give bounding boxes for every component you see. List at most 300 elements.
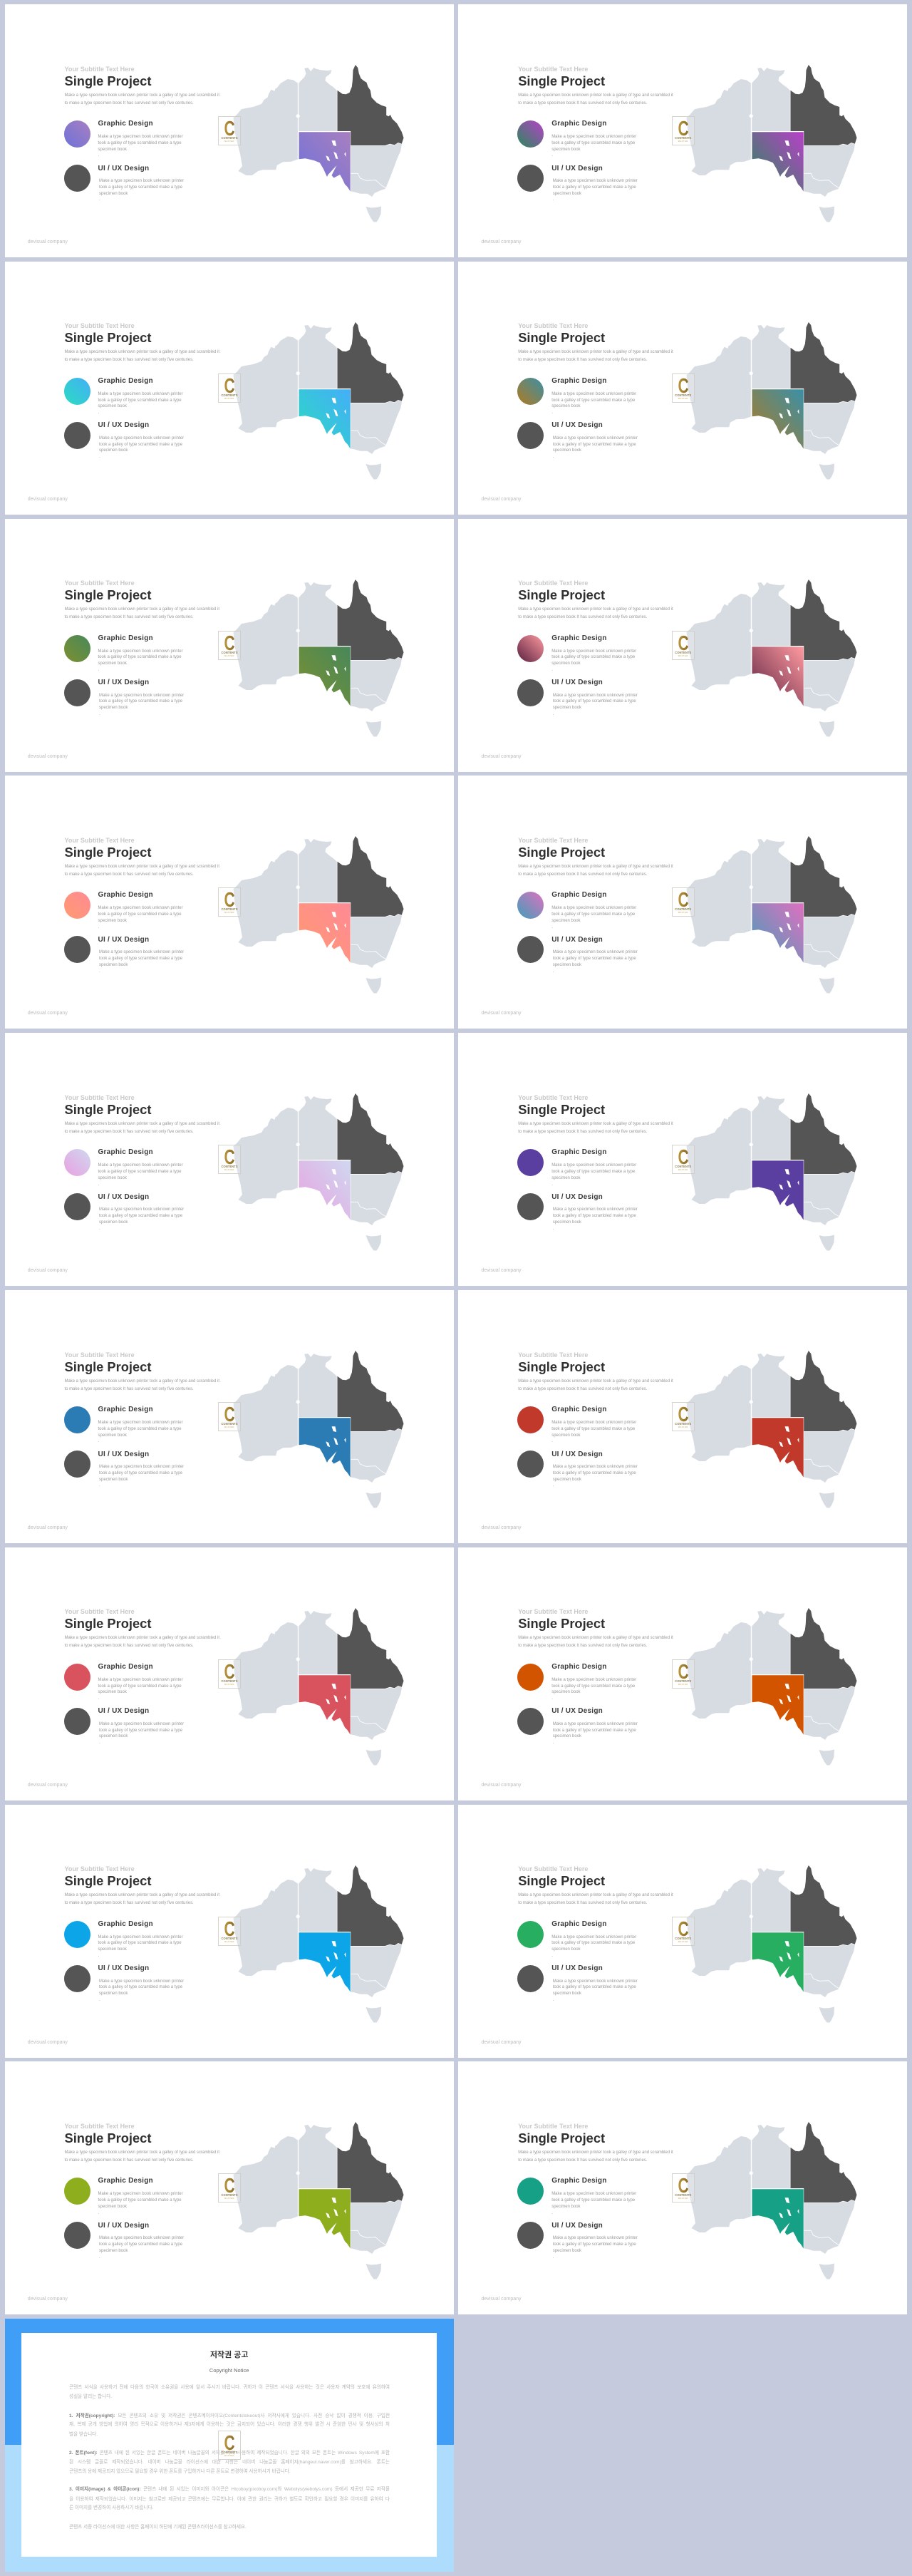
subtitle: Your Subtitle Text Here xyxy=(64,322,135,329)
logo watermark: CONTENTS xyxy=(675,1422,691,1426)
icon: graphic design circle xyxy=(64,1921,90,1948)
panel: slide 15 xyxy=(4,1805,454,2058)
logo watermark: CONTENTS xyxy=(221,651,238,654)
heading: UI UX design: UI / UX Design xyxy=(551,1707,603,1715)
icon: UI UX circle xyxy=(517,1451,544,1478)
heading: copyright notice Korean: 저작권 공고 xyxy=(210,2351,248,2359)
text: graphic design body: Make a type specimen book unknown printer took a galley of type scrambled make a type specimen book . xyxy=(98,1935,183,1958)
logo watermark: CONTENTS xyxy=(221,1679,238,1683)
logo watermark: MASTER xyxy=(678,140,688,143)
logo watermark xyxy=(218,887,241,917)
footer: devisual company xyxy=(481,2297,522,2302)
icon: graphic design circle xyxy=(517,378,544,405)
map: Australia xyxy=(687,1093,856,1250)
title: Single Project xyxy=(64,1102,151,1117)
title: Single Project xyxy=(518,1616,605,1631)
text: UI UX body: Make a type specimen book unknown printer took a galley of type scrambled make a type specimen book . xyxy=(553,694,638,716)
description line 2: to make a type specimen book It has survived not only five centuries. xyxy=(64,101,194,105)
description line 2: to make a type specimen book It has survived not only five centuries. xyxy=(518,101,647,105)
subtitle: Your Subtitle Text Here xyxy=(518,837,588,844)
logo watermark: MASTER xyxy=(678,1684,688,1686)
description line 2: to make a type specimen book It has survived not only five centuries. xyxy=(64,1901,194,1905)
logo watermark: MASTER xyxy=(224,1684,234,1686)
text: UI UX body: Make a type specimen book unknown printer took a galley of type scrambled make a type specimen book . xyxy=(99,694,184,716)
title: Single Project xyxy=(518,1359,605,1374)
footer: devisual company xyxy=(28,1525,68,1530)
icon: UI UX circle xyxy=(64,1965,90,1992)
logo watermark: C xyxy=(678,1661,688,1684)
text: UI UX body: Make a type specimen book unknown printer took a galley of type scrambled make a type specimen book . xyxy=(99,1207,184,1231)
map: Australia xyxy=(234,2122,403,2279)
heading: graphic design: Graphic Design xyxy=(551,2177,607,2185)
heading: graphic design: Graphic Design xyxy=(551,1920,607,1928)
description line 1: Make a type specimen book unknown printer took a galley of type and scrambled it xyxy=(64,607,219,612)
heading: UI UX design: UI / UX Design xyxy=(98,1707,149,1715)
icon: UI UX circle xyxy=(517,1708,544,1735)
title: Single Project xyxy=(518,73,605,88)
text: UI UX body: Make a type specimen book unknown printer took a galley of type scrambled make a type specimen book . xyxy=(553,1979,638,2002)
map: Australia xyxy=(687,65,856,222)
logo watermark: C xyxy=(678,2175,688,2198)
logo watermark: CONTENTS xyxy=(221,393,238,397)
heading: UI UX design: UI / UX Design xyxy=(98,2222,149,2230)
footer: devisual company xyxy=(28,1268,68,1273)
subtitle: Your Subtitle Text Here xyxy=(64,1608,135,1615)
logo watermark: C xyxy=(224,118,235,140)
footer: devisual company xyxy=(28,2297,68,2302)
logo watermark: CONTENTS xyxy=(675,1679,691,1683)
logo watermark: MASTER xyxy=(678,655,688,657)
text: closing line: 콘텐츠 서증 라이선스에 대한 사항은 홈페이지 하단에 기재된 콘텐츠라이선스를 참고하세요. xyxy=(69,2525,247,2530)
text: graphic design body: Make a type specimen book unknown printer took a galley of type scrambled make a type specimen book . xyxy=(551,1678,636,1701)
icon: graphic design circle xyxy=(517,1664,544,1691)
text: intro line 1: 콘텐츠 서식을 사용하기 전에 다음의 한국어 소유권을 사용에 앞서 주시기 바랍니다. 귀하가 이 콘텐츠 서식을 사용하는 것은 사용자 계약의 보호에 유의하여 xyxy=(69,2385,390,2390)
heading: UI UX design: UI / UX Design xyxy=(551,421,603,429)
footer: devisual company xyxy=(28,497,68,502)
logo watermark xyxy=(218,373,241,403)
map: Australia xyxy=(687,1608,856,1765)
description line 1: Make a type specimen book unknown printer took a galley of type and scrambled it xyxy=(64,93,219,97)
logo watermark xyxy=(218,1659,241,1689)
icon: graphic design circle xyxy=(64,1149,90,1176)
title: Single Project xyxy=(518,2131,605,2145)
heading: graphic design: Graphic Design xyxy=(551,1663,607,1671)
heading: graphic design: Graphic Design xyxy=(551,1406,607,1413)
description line 2: to make a type specimen book It has survived not only five centuries. xyxy=(518,358,647,362)
description line 2: to make a type specimen book It has survived not only five centuries. xyxy=(518,872,647,877)
icon: graphic design circle xyxy=(517,1921,544,1948)
logo watermark xyxy=(672,887,695,917)
heading: UI UX design: UI / UX Design xyxy=(98,1964,149,1972)
logo watermark: MASTER xyxy=(224,1426,234,1428)
description line 2: to make a type specimen book It has survived not only five centuries. xyxy=(518,2158,647,2163)
logo watermark: CONTENTS xyxy=(675,907,691,911)
panel: white notice card xyxy=(21,2333,437,2557)
logo watermark xyxy=(672,1402,695,1431)
heading: graphic design: Graphic Design xyxy=(98,891,153,899)
description line 1: Make a type specimen book unknown printer took a galley of type and scrambled it xyxy=(64,350,219,354)
heading: graphic design: Graphic Design xyxy=(551,634,607,642)
icon: UI UX circle xyxy=(517,1193,544,1220)
panel: slide 10 xyxy=(458,1033,907,1286)
icon: graphic design circle xyxy=(64,892,90,919)
panel: slide 7 xyxy=(4,776,454,1029)
heading: UI UX design: UI / UX Design xyxy=(98,421,149,429)
logo watermark: C xyxy=(678,1403,688,1426)
heading: graphic design: Graphic Design xyxy=(98,1148,153,1156)
description line 1: Make a type specimen book unknown printer took a galley of type and scrambled it xyxy=(518,1379,673,1383)
logo watermark xyxy=(218,2173,241,2203)
map: Australia xyxy=(687,1351,856,1508)
logo watermark: CONTENTS xyxy=(221,2193,238,2197)
description line 1: Make a type specimen book unknown printer took a galley of type and scrambled it xyxy=(518,1122,673,1126)
icon: graphic design circle xyxy=(64,1406,90,1433)
logo watermark xyxy=(672,1145,695,1174)
logo watermark: C xyxy=(224,1661,235,1684)
title: Single Project xyxy=(518,845,605,860)
logo watermark: MASTER xyxy=(678,1426,688,1428)
description line 1: Make a type specimen book unknown printer took a galley of type and scrambled it xyxy=(518,2150,673,2155)
text: section 1 line 2: 재, 복제 공개 방법에 의하여 영리 목적으로 이용하거나 제3자에게 이용하는 것은 금지되어 있습니다. 이러한 경쟁 행위 발견 시 준엄한 민사 및 형사상의 처 xyxy=(69,2422,390,2427)
heading: UI UX design: UI / UX Design xyxy=(98,1451,149,1458)
description line 2: to make a type specimen book It has survived not only five centuries. xyxy=(64,872,194,877)
text: graphic design body: Make a type specimen book unknown printer took a galley of type scrambled make a type specimen book . xyxy=(551,1935,636,1958)
text: UI UX body: Make a type specimen book unknown printer took a galley of type scrambled make a type specimen book . xyxy=(99,950,184,974)
map: Australia xyxy=(687,2122,856,2279)
subtitle: Your Subtitle Text Here xyxy=(64,579,135,587)
text: section 3 line 2: 을 이용하여 제작되었습니다. 이미지는 참고로만 제공되고 콘텐츠에는 무료합니다. 이에 관한 권리는 귀하가 별도로 확인하고 필요할 경우 이미지를 유하여 다 xyxy=(69,2497,390,2502)
map: Australia xyxy=(687,836,856,994)
logo watermark: C xyxy=(224,1146,235,1169)
heading: UI UX design: UI / UX Design xyxy=(551,679,603,686)
text: graphic design body: Make a type specimen book unknown printer took a galley of type scrambled make a type specimen book . xyxy=(98,906,183,929)
description line 2: to make a type specimen book It has survived not only five centuries. xyxy=(518,1387,647,1391)
footer: devisual company xyxy=(481,1525,522,1530)
icon: UI UX circle xyxy=(517,2222,544,2249)
description line 1: Make a type specimen book unknown printer took a galley of type and scrambled it xyxy=(518,1636,673,1640)
description line 2: to make a type specimen book It has survived not only five centuries. xyxy=(64,358,194,362)
logo watermark: CONTENTS xyxy=(221,136,238,140)
footer: devisual company xyxy=(481,1783,522,1788)
heading: graphic design: Graphic Design xyxy=(98,1406,153,1413)
title: Single Project xyxy=(64,330,151,345)
icon: graphic design circle xyxy=(64,120,90,148)
text: UI UX body: Make a type specimen book unknown printer took a galley of type scrambled make a type specimen book . xyxy=(553,1722,638,1745)
heading: UI UX design: UI / UX Design xyxy=(551,1193,603,1201)
title: Single Project xyxy=(64,1873,151,1888)
map: Australia xyxy=(234,65,403,222)
text: UI UX body: Make a type specimen book unknown printer took a galley of type scrambled make a type specimen book . xyxy=(99,179,184,202)
text: graphic design body: Make a type specimen book unknown printer took a galley of type scrambled make a type specimen book . xyxy=(551,1163,636,1187)
icon: graphic design circle xyxy=(517,1406,544,1433)
title: Single Project xyxy=(518,587,605,602)
subtitle: Your Subtitle Text Here xyxy=(64,1351,135,1359)
logo watermark: C xyxy=(224,1918,235,1941)
description line 1: Make a type specimen book unknown printer took a galley of type and scrambled it xyxy=(518,1893,673,1897)
logo watermark xyxy=(672,373,695,403)
heading: UI UX design: UI / UX Design xyxy=(98,165,149,172)
subtitle: Your Subtitle Text Here xyxy=(518,1094,588,1101)
heading: UI UX design: UI / UX Design xyxy=(98,936,149,944)
logo watermark xyxy=(672,1659,695,1689)
icon: graphic design circle xyxy=(517,635,544,662)
subtitle: Your Subtitle Text Here xyxy=(518,322,588,329)
text: graphic design body: Make a type specimen book unknown printer took a galley of type scrambled make a type specimen book . xyxy=(551,906,636,929)
panel: slide 3 xyxy=(4,262,454,515)
description line 2: to make a type specimen book It has survived not only five centuries. xyxy=(64,2158,194,2163)
logo watermark: MASTER xyxy=(224,398,234,400)
logo watermark: C xyxy=(224,375,235,398)
logo watermark: C xyxy=(678,1146,688,1169)
description line 2: to make a type specimen book It has survived not only five centuries. xyxy=(64,1387,194,1391)
text: graphic design body: Make a type specimen book unknown printer took a galley of type scrambled make a type specimen book . xyxy=(551,1421,636,1443)
subtitle: Your Subtitle Text Here xyxy=(64,1094,135,1101)
text: UI UX body: Make a type specimen book unknown printer took a galley of type scrambled make a type specimen book . xyxy=(553,436,638,459)
footer: devisual company xyxy=(481,1011,522,1016)
panel: slide 12 xyxy=(458,1290,907,1543)
icon: UI UX circle xyxy=(517,679,544,706)
description line 1: Make a type specimen book unknown printer took a galley of type and scrambled it xyxy=(64,865,219,869)
subtitle: Your Subtitle Text Here xyxy=(64,837,135,844)
text: section 2 line 2: 된 시스템 글꼴로 제작되었습니다. 네이버 나눔글꼴 라이선스에 대한 사항은 네이버 나눔글꼴 홈페이지(hangeul.naver.com)를 참고하세요. 폰트는 xyxy=(69,2460,390,2465)
logo watermark: CONTENTS xyxy=(675,651,691,654)
text: graphic design body: Make a type specimen book unknown printer took a galley of type scrambled make a type specimen book . xyxy=(98,1163,183,1187)
logo watermark xyxy=(672,116,695,145)
logo watermark: CONTENTS xyxy=(675,1165,691,1168)
description line 1: Make a type specimen book unknown printer took a galley of type and scrambled it xyxy=(64,1122,219,1126)
description line 2: to make a type specimen book It has survived not only five centuries. xyxy=(518,1644,647,1648)
background: light blue band xyxy=(4,2445,454,2572)
logo watermark: C xyxy=(224,889,235,912)
text: graphic design body: Make a type specimen book unknown printer took a galley of type scrambled make a type specimen book . xyxy=(98,392,183,415)
title: Single Project xyxy=(518,1873,605,1888)
title: Single Project xyxy=(64,73,151,88)
logo watermark: C xyxy=(678,1918,688,1941)
description line 1: Make a type specimen book unknown printer took a galley of type and scrambled it xyxy=(518,350,673,354)
footer: devisual company xyxy=(481,1268,522,1273)
logo watermark: MASTER xyxy=(224,912,234,914)
heading: graphic design: Graphic Design xyxy=(551,891,607,899)
description line 2: to make a type specimen book It has survived not only five centuries. xyxy=(518,1901,647,1905)
map: Australia xyxy=(234,1608,403,1765)
logo watermark: CONTENTS xyxy=(221,1937,238,1940)
description line 1: Make a type specimen book unknown printer took a galley of type and scrambled it xyxy=(64,2150,219,2155)
title: Single Project xyxy=(64,587,151,602)
icon: UI UX circle xyxy=(64,1451,90,1478)
logo watermark: C xyxy=(678,375,688,398)
description line 2: to make a type specimen book It has survived not only five centuries. xyxy=(64,1644,194,1648)
description line 1: Make a type specimen book unknown printer took a galley of type and scrambled it xyxy=(64,1379,219,1383)
heading: graphic design: Graphic Design xyxy=(551,377,607,385)
logo watermark: CONTENTS xyxy=(675,393,691,397)
footer: devisual company xyxy=(481,239,522,244)
heading: UI UX design: UI / UX Design xyxy=(98,1193,149,1201)
text: section 1 line 1: 1. 저작권(copyright): 모든 콘텐츠의 소유 및 저작권은 콘텐츠메이커이오(Contentstokeout)사 저작사에게 있습니다. 사전 승낙 없이 경쟁적 이용, 구입전 xyxy=(69,2413,390,2418)
icon: UI UX circle xyxy=(64,1708,90,1735)
title: Single Project xyxy=(518,1102,605,1117)
logo watermark: MASTER xyxy=(224,655,234,657)
logo watermark xyxy=(672,1917,695,1946)
heading: graphic design: Graphic Design xyxy=(551,1148,607,1156)
title: Single Project xyxy=(64,1359,151,1374)
text: graphic design body: Make a type specimen book unknown printer took a galley of type scrambled make a type specimen book . xyxy=(551,2192,636,2215)
logo watermark: CONTENTS xyxy=(675,1937,691,1940)
description line 1: Make a type specimen book unknown printer took a galley of type and scrambled it xyxy=(64,1636,219,1640)
text: section 2 line 3: 콘텐츠의 용에 제공되지 않으므로 필요할 경우 위한 폰트를 구입하거나 다른 폰트로 변경하여 사용하시기 바랍니다. xyxy=(69,2469,291,2474)
title: Single Project xyxy=(64,1616,151,1631)
heading: graphic design: Graphic Design xyxy=(98,120,153,128)
panel: slide 6 xyxy=(458,519,907,772)
logo watermark: CONTENTS xyxy=(675,136,691,140)
text: section 3 line 1: 3. 이미지(image) & 아이콘(icon): 콘텐츠 내에 된 서있는 이미지와 아이콘은 Hicoboy(pixoboy.com)와 Webolys(webolys.com) 등에서 제공한 무료 저작물 xyxy=(69,2487,390,2492)
footer: devisual company xyxy=(28,754,68,759)
icon: UI UX circle xyxy=(64,165,90,192)
panel: slide 5 xyxy=(4,519,454,772)
logo watermark: C xyxy=(224,2175,235,2198)
description line 2: to make a type specimen book It has survived not only five centuries. xyxy=(518,1130,647,1134)
panel: slide 14 xyxy=(458,1547,907,1800)
text: section 2 line 1: 2. 폰트(font): 콘텐츠 내에 된 서있는 한글 폰트는 네이버 나눔글꼴의 서체를 따라 사용하여 제작되었습니다. 한글 외의 모든 폰트는 Windows System에 포함 xyxy=(69,2451,390,2456)
logo watermark: C xyxy=(678,118,688,140)
text: UI UX body: Make a type specimen book unknown printer took a galley of type scrambled make a type specimen book . xyxy=(553,1207,638,1231)
heading: graphic design: Graphic Design xyxy=(98,377,153,385)
panel: slide 1 xyxy=(4,4,454,257)
subtitle: Your Subtitle Text Here xyxy=(64,66,135,73)
description line 2: to make a type specimen book It has survived not only five centuries. xyxy=(518,615,647,619)
logo watermark xyxy=(218,1917,241,1946)
logo watermark: MASTER xyxy=(224,2198,234,2200)
logo watermark xyxy=(218,1402,241,1431)
panel: slide 4 xyxy=(458,262,907,515)
map: Australia xyxy=(687,579,856,737)
text: graphic design body: Make a type specimen book unknown printer took a galley of type scrambled make a type specimen book . xyxy=(98,2192,183,2215)
heading: UI UX design: UI / UX Design xyxy=(551,936,603,944)
text: intro line 2: 성실을 알리는 합니다. xyxy=(69,2394,112,2399)
logo watermark xyxy=(218,2431,241,2460)
logo watermark xyxy=(672,631,695,660)
heading: graphic design: Graphic Design xyxy=(98,2177,153,2185)
icon: graphic design circle xyxy=(517,2178,544,2205)
heading: UI UX design: UI / UX Design xyxy=(551,165,603,172)
logo watermark: MASTER xyxy=(224,1941,234,1943)
subtitle: Your Subtitle Text Here xyxy=(518,1865,588,1872)
logo watermark: MASTER xyxy=(678,2198,688,2200)
title: Single Project xyxy=(518,330,605,345)
map: Australia xyxy=(234,836,403,994)
map: Australia xyxy=(234,1865,403,2023)
logo watermark: MASTER xyxy=(224,2455,234,2457)
text: section 1 line 3: 벌을 받습니다. xyxy=(69,2432,98,2437)
icon: UI UX circle xyxy=(517,1965,544,1992)
subtitle: Your Subtitle Text Here xyxy=(518,579,588,587)
icon: graphic design circle xyxy=(64,2178,90,2205)
description line 1: Make a type specimen book unknown printer took a galley of type and scrambled it xyxy=(518,93,673,97)
logo watermark: CONTENTS xyxy=(675,2193,691,2197)
text: UI UX body: Make a type specimen book unknown printer took a galley of type scrambled make a type specimen book . xyxy=(553,179,638,202)
description line 1: Make a type specimen book unknown printer took a galley of type and scrambled it xyxy=(518,607,673,612)
map: Australia xyxy=(234,579,403,737)
text: graphic design body: Make a type specimen book unknown printer took a galley of type scrambled make a type specimen book . xyxy=(551,649,636,672)
text: graphic design body: Make a type specimen book unknown printer took a galley of type scrambled make a type specimen book . xyxy=(551,392,636,415)
icon: graphic design circle xyxy=(64,1664,90,1691)
logo watermark: C xyxy=(224,1403,235,1426)
map: Australia xyxy=(687,1865,856,2023)
logo watermark xyxy=(672,2173,695,2203)
heading: graphic design: Graphic Design xyxy=(98,634,153,642)
title: Single Project xyxy=(64,845,151,860)
logo watermark: C xyxy=(224,2432,235,2455)
logo watermark xyxy=(218,1145,241,1174)
logo watermark xyxy=(218,631,241,660)
text: UI UX body: Make a type specimen book unknown printer took a galley of type scrambled make a type specimen book . xyxy=(99,1465,184,1488)
text: UI UX body: Make a type specimen book unknown printer took a galley of type scrambled make a type specimen book . xyxy=(99,1722,184,1745)
icon: graphic design circle xyxy=(517,1149,544,1176)
logo watermark: CONTENTS xyxy=(221,907,238,911)
panel: slide 8 xyxy=(458,776,907,1029)
background: blue band xyxy=(4,2319,454,2445)
icon: UI UX circle xyxy=(64,422,90,449)
logo watermark: MASTER xyxy=(224,1169,234,1171)
logo watermark: CONTENTS xyxy=(221,1422,238,1426)
subtitle: Your Subtitle Text Here xyxy=(518,1351,588,1359)
footer: devisual company xyxy=(481,2040,522,2045)
title: Single Project xyxy=(64,2131,151,2145)
icon: UI UX circle xyxy=(517,936,544,963)
footer: devisual company xyxy=(28,1011,68,1016)
icon: UI UX circle xyxy=(64,936,90,963)
panel: slide 2 xyxy=(458,4,907,257)
footer: devisual company xyxy=(28,239,68,244)
text: UI UX body: Make a type specimen book unknown printer took a galley of type scrambled make a type specimen book . xyxy=(553,1465,638,1488)
logo watermark: C xyxy=(678,889,688,912)
heading: UI UX design: UI / UX Design xyxy=(98,679,149,686)
icon: graphic design circle xyxy=(64,378,90,405)
icon: graphic design circle xyxy=(517,892,544,919)
text: UI UX body: Make a type specimen book unknown printer took a galley of type scrambled make a type specimen book . xyxy=(99,2236,184,2260)
footer: devisual company xyxy=(481,754,522,759)
footer: devisual company xyxy=(481,497,522,502)
logo watermark: CONTENTS xyxy=(221,1165,238,1168)
text: graphic design body: Make a type specimen book unknown printer took a galley of type scrambled make a type specimen book . xyxy=(98,1678,183,1701)
description line 2: to make a type specimen book It has survived not only five centuries. xyxy=(64,615,194,619)
description line 2: to make a type specimen book It has survived not only five centuries. xyxy=(64,1130,194,1134)
panel: slide 17 xyxy=(4,2061,454,2314)
text: graphic design body: Make a type specimen book unknown printer took a galley of type scrambled make a type specimen book . xyxy=(98,1421,183,1443)
heading: UI UX design: UI / UX Design xyxy=(551,2222,603,2230)
icon: UI UX circle xyxy=(64,1193,90,1220)
text: section 3 line 3: 른 이미지를 변경하여 사용하시기 바랍니다. xyxy=(69,2505,153,2510)
map: Australia xyxy=(234,1351,403,1508)
icon: UI UX circle xyxy=(517,165,544,192)
logo watermark: MASTER xyxy=(678,912,688,914)
map: Australia xyxy=(234,322,403,479)
heading: UI UX design: UI / UX Design xyxy=(551,1451,603,1458)
logo watermark: C xyxy=(224,632,235,655)
logo watermark: CONTENTS xyxy=(221,2451,238,2454)
text: UI UX body: Make a type specimen book unknown printer took a galley of type scrambled make a type specimen book . xyxy=(553,2236,638,2260)
icon: UI UX circle xyxy=(64,2222,90,2249)
icon: graphic design circle xyxy=(64,635,90,662)
subtitle: Your Subtitle Text Here xyxy=(518,2123,588,2130)
subheading: copyright notice: Copyright Notice xyxy=(209,2367,249,2374)
icon: UI UX circle xyxy=(64,679,90,706)
icon: graphic design circle xyxy=(517,120,544,148)
logo watermark: MASTER xyxy=(678,1941,688,1943)
footer: devisual company xyxy=(28,2040,68,2045)
description line 1: Make a type specimen book unknown printer took a galley of type and scrambled it xyxy=(64,1893,219,1897)
subtitle: Your Subtitle Text Here xyxy=(64,2123,135,2130)
panel: copyright notice xyxy=(4,2319,454,2572)
